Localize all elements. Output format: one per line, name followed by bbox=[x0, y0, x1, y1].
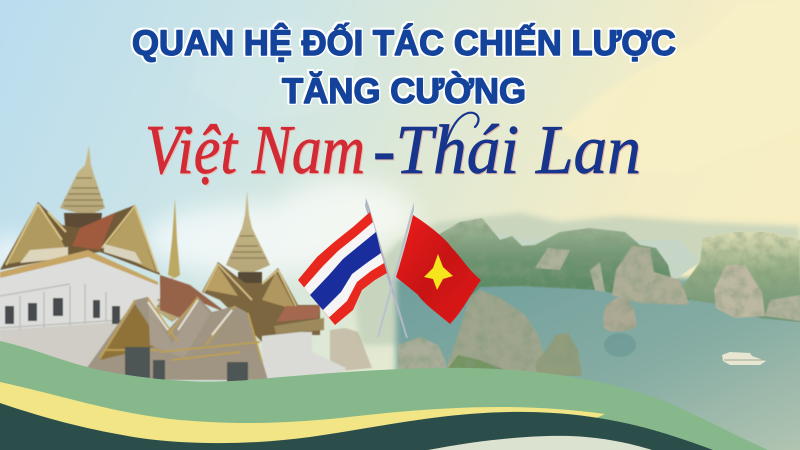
palace: Grand Palace Bangkok bbox=[0, 145, 372, 384]
cruise boat bbox=[722, 352, 766, 365]
yellow wave band bbox=[0, 382, 605, 450]
decorative bottom bands bbox=[0, 341, 768, 450]
wall base storey bbox=[0, 322, 122, 376]
script swash on Thái bbox=[437, 113, 479, 172]
palace windows bbox=[5, 298, 120, 324]
flags bbox=[298, 198, 481, 338]
reflection of islet bbox=[604, 333, 636, 357]
title line 1: QUAN HỆ ĐỐI TÁC CHIẾN LƯỢC bbox=[132, 23, 676, 63]
dark wave band bbox=[0, 403, 713, 450]
main tower bbox=[60, 145, 105, 236]
green wave band bbox=[0, 341, 768, 450]
Thailand flag bbox=[298, 212, 387, 325]
faint world map shapes bbox=[190, 0, 800, 175]
Vietnam flag bbox=[396, 215, 481, 324]
pale wedge under dark band bbox=[428, 436, 652, 450]
script heading: Thái Lan: -Thái Lan bbox=[373, 112, 641, 189]
wall pilasters bbox=[0, 284, 122, 330]
hazy far pavilion bbox=[330, 328, 372, 372]
front pavilion bbox=[84, 297, 268, 384]
brown roof behind pavilion bbox=[160, 275, 227, 320]
right hall terrace bbox=[262, 332, 346, 380]
flag pole: Vietnam bbox=[377, 202, 414, 337]
right tower bbox=[226, 190, 270, 290]
main hall white walls bbox=[0, 257, 160, 378]
main hall roof bbox=[0, 202, 160, 287]
scene: Ha Long Bay bbox=[355, 213, 800, 450]
clouds bbox=[0, 180, 415, 276]
title line 2: TĂNG CƯỜNG bbox=[282, 71, 526, 111]
title bbox=[132, 23, 676, 189]
haze on far water bbox=[490, 232, 700, 290]
limestone hills back ridge bbox=[438, 218, 800, 322]
far hazy islands bbox=[355, 213, 800, 345]
rock islet bbox=[603, 297, 637, 332]
center spire bbox=[155, 198, 190, 322]
flag pole: Thailand bbox=[365, 198, 408, 338]
foreground rocks bbox=[398, 290, 582, 376]
right hall roof bbox=[202, 262, 324, 345]
yellow star bbox=[424, 254, 453, 290]
sea bbox=[396, 278, 800, 450]
script heading: Việt Nam: Việt Nam bbox=[145, 112, 365, 189]
